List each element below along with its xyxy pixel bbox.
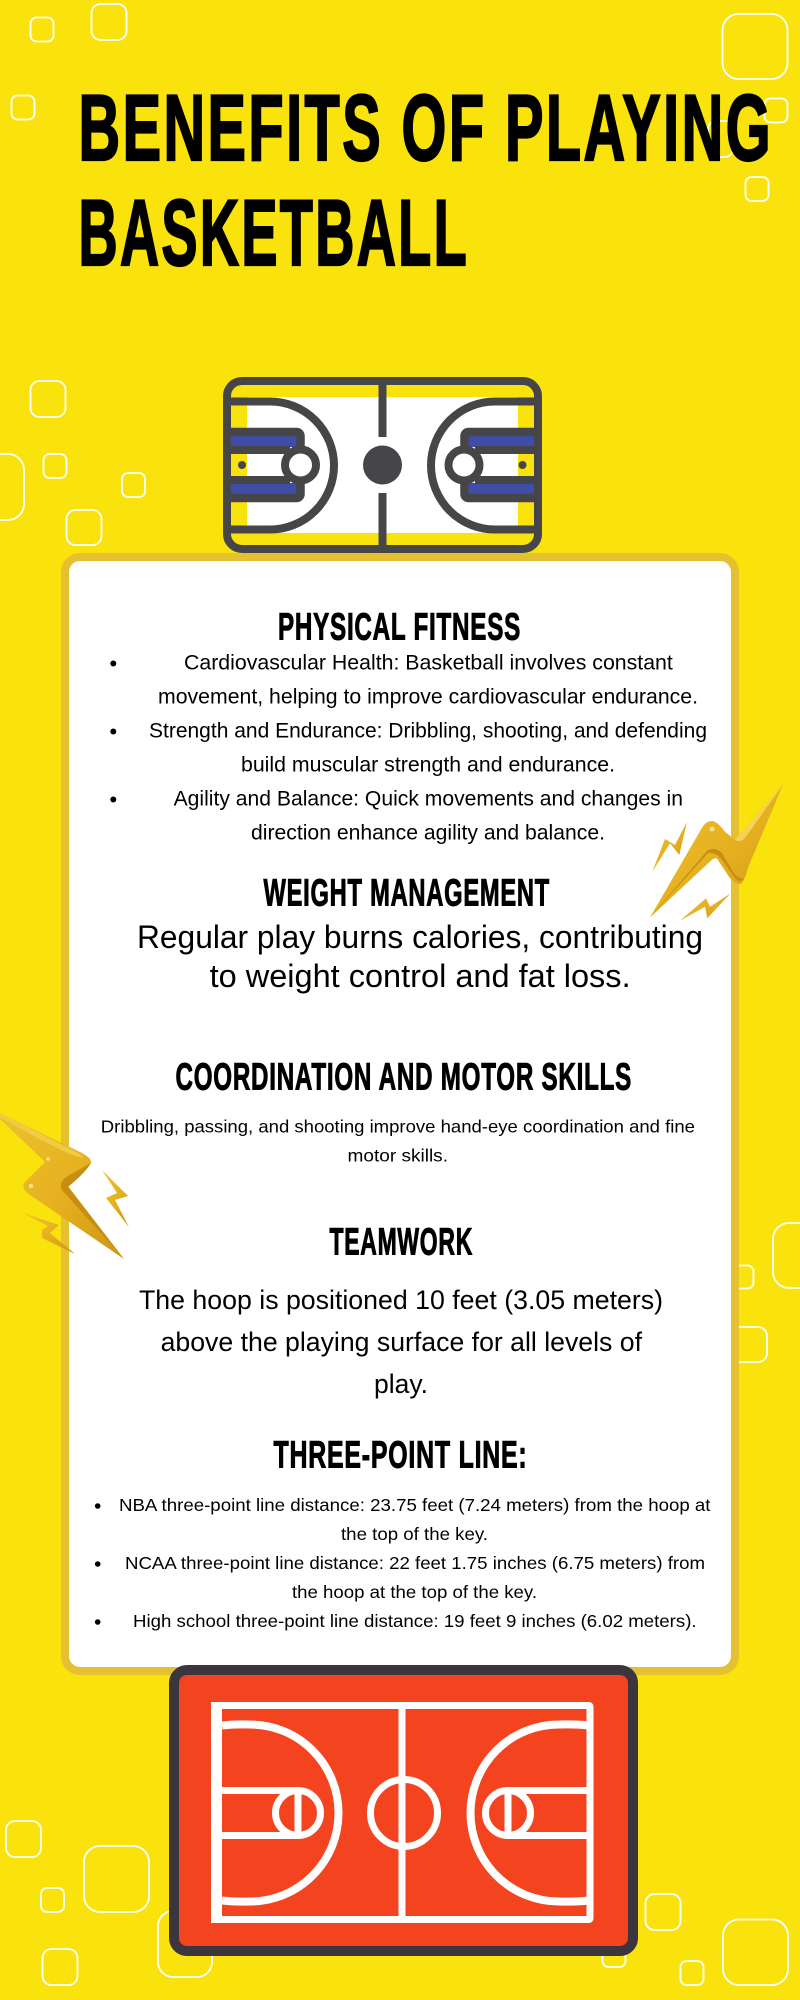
list: physical fitness bullets: direction enhance agility and balance. bbox=[251, 822, 605, 844]
icon: red basketball court bbox=[174, 1670, 633, 1951]
list: three-point line bullets: NCAA three-point line distance: 22 feet 1.75 inches (6.75 meters) from bbox=[125, 1553, 705, 1573]
icon: left lightning bolts bbox=[0, 1113, 129, 1259]
list: three-point line bullets: the top of the key. bbox=[341, 1524, 488, 1544]
text: coordination bbox=[101, 1116, 695, 1166]
text: teamwork: play. bbox=[374, 1369, 428, 1399]
list: physical fitness bullets: Cardiovascular Health: Basketball involves constant bbox=[184, 652, 673, 674]
list: physical fitness bullets: Strength and Endurance: Dribbling, shooting, and defending bbox=[149, 720, 707, 742]
title: BASKETBALL bbox=[78, 180, 469, 285]
list: physical fitness bullets bbox=[110, 652, 707, 844]
heading: teamwork: TEAMWORK bbox=[330, 1222, 473, 1264]
text: coordination: motor skills. bbox=[348, 1146, 448, 1166]
list: three-point line bullets: NBA three-point line distance: 23.75 feet (7.24 meters) from the hoop at bbox=[119, 1495, 711, 1515]
text: weight management: Regular play burns calories, contributing bbox=[137, 919, 703, 955]
list: physical fitness bullets: movement, helping to improve cardiovascular endurance. bbox=[158, 686, 698, 708]
heading: weight management: WEIGHT MANAGEMENT bbox=[264, 872, 550, 914]
icon: right lightning bolts bbox=[650, 784, 783, 921]
text: coordination: Dribbling, passing, and shooting improve hand-eye coordination and fine bbox=[101, 1116, 695, 1136]
panel: content card bbox=[65, 557, 735, 1671]
text: teamwork bbox=[139, 1285, 663, 1399]
list: physical fitness bullets: Agility and Balance: Quick movements and changes in bbox=[174, 788, 683, 810]
icon: yellow and white basketball court bbox=[227, 381, 538, 549]
heading: three-point line: THREE-POINT LINE: bbox=[274, 1434, 528, 1476]
list: physical fitness bullets: build muscular strength and endurance. bbox=[241, 754, 615, 776]
text: weight management: to weight control and fat loss. bbox=[210, 958, 631, 994]
list: three-point line bullets: High school three-point line distance: 19 feet 9 inches (6.02 meters). bbox=[133, 1611, 697, 1631]
list: three-point line bullets bbox=[95, 1495, 711, 1631]
heading: physical fitness: PHYSICAL FITNESS bbox=[278, 606, 521, 648]
text: weight management bbox=[137, 919, 703, 994]
text: teamwork: above the playing surface for all levels of bbox=[161, 1327, 643, 1357]
title bbox=[78, 75, 773, 285]
text: teamwork: The hoop is positioned 10 feet (3.05 meters) bbox=[139, 1285, 663, 1315]
list: three-point line bullets: the hoop at the top of the key. bbox=[292, 1582, 537, 1602]
